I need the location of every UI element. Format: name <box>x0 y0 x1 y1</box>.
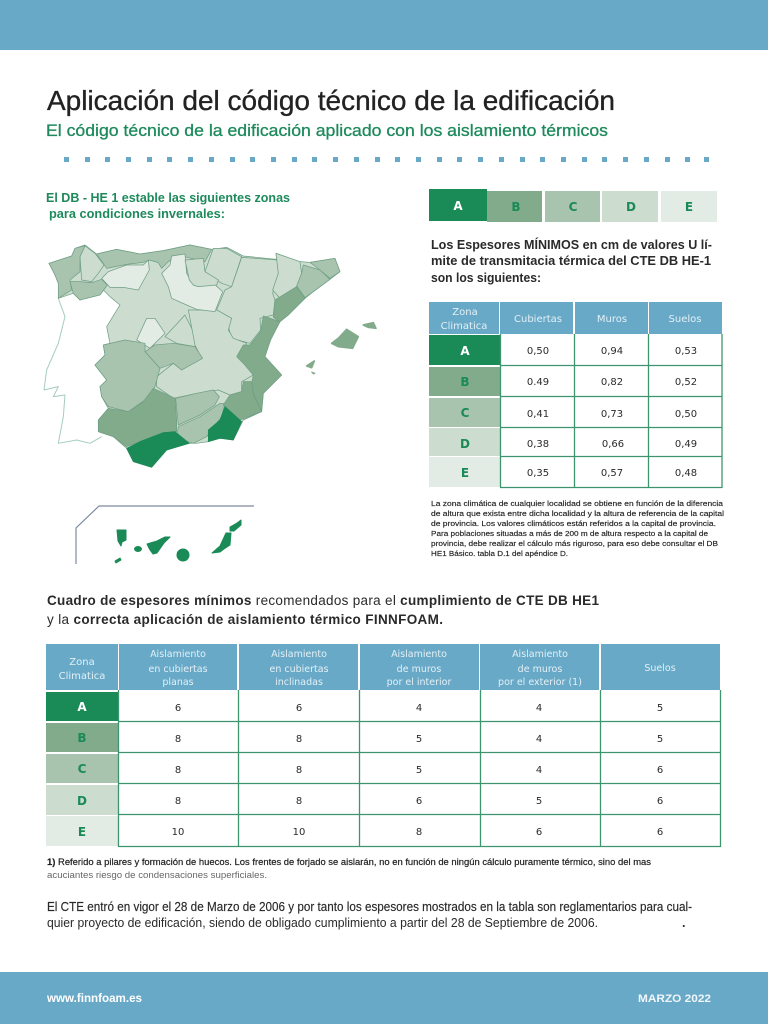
table values: 0,41 <box>527 409 549 420</box>
map intro text: para condiciones invernales: <box>49 207 225 221</box>
dotted divider <box>64 157 709 162</box>
table header: Cubiertas <box>514 314 562 325</box>
zone legend: B <box>511 200 521 214</box>
minimum thickness intro text: Los Espesores MÍNIMOS en cm de valores U lí- <box>431 237 712 252</box>
zone cells <box>46 692 118 846</box>
table footnote: acuciantes riesgo de condensaciones superficiales. <box>47 870 267 880</box>
closing paragraph: . <box>682 916 685 930</box>
zone cells: E <box>78 825 86 839</box>
table values: 5 <box>416 734 422 745</box>
zone cells: D <box>77 794 87 808</box>
climate zone note: La zona climática de cualquier localidad se obtiene en función de la diferencia <box>431 499 724 508</box>
zone cells: A <box>77 700 87 714</box>
map of Spain climate zones <box>44 245 376 467</box>
website: www.finnfoam.es <box>46 993 142 1005</box>
table header: por el interior <box>387 677 451 688</box>
zone legend: C <box>569 200 578 214</box>
climate zone note: provincia, debe realizar el cálculo más riguroso, para eso debe consultar el DB <box>431 539 718 548</box>
closing paragraph <box>47 900 692 930</box>
table header: en cubiertas <box>148 664 208 675</box>
Portugal outline <box>44 298 102 443</box>
table values: 10 <box>172 827 184 838</box>
climate zone note: de provincia. Los valores climáticos están referidos a la capital de provincia. <box>431 519 716 528</box>
table header: Aislamiento <box>391 649 447 660</box>
table values: 0,35 <box>527 468 549 479</box>
table header: en cubiertas <box>269 664 329 675</box>
table values: 6 <box>657 765 663 776</box>
table values: 5 <box>536 796 542 807</box>
table: U-value limits <box>429 302 722 488</box>
table values: 4 <box>536 765 542 776</box>
table values: 6 <box>175 703 181 714</box>
zone legend: E <box>685 200 693 214</box>
table values: 6 <box>657 827 663 838</box>
table values: 4 <box>536 703 542 714</box>
table header: Suelos <box>644 663 676 674</box>
climate zone note: HE1 Básico. tabla D.1 del apéndice D. <box>431 549 568 558</box>
table values: 0,66 <box>602 439 624 450</box>
zone legend <box>429 189 717 222</box>
table values: 0,52 <box>675 377 697 388</box>
table header: Climatica <box>59 671 105 682</box>
table values: 6 <box>296 703 302 714</box>
table values: 6 <box>536 827 542 838</box>
land base <box>49 245 340 467</box>
minimum thickness intro text: son los siguientes: <box>431 271 541 285</box>
minimum thickness intro text <box>431 237 712 285</box>
table values: 8 <box>175 734 181 745</box>
zone cells: D <box>460 437 470 451</box>
table values: 6 <box>657 796 663 807</box>
zone legend: D <box>626 200 636 214</box>
table values: 5 <box>657 703 663 714</box>
zone cells: C <box>78 762 87 776</box>
zone legend: A <box>453 199 463 213</box>
table values: 8 <box>296 796 302 807</box>
table values: 8 <box>416 827 422 838</box>
climate zone note: de altura que exista entre dicha localidad y la altura de referencia de la capital <box>431 509 724 518</box>
table footnote: 1) Referido a pilares y formación de huecos. Los frentes de forjado se aislarán, no en función de ningún cálculo puramente térmico, sino del mas <box>47 857 652 867</box>
section heading: y la correcta aplicación de aislamiento térmico FINNFOAM. <box>47 612 443 627</box>
table header: Aislamiento <box>150 649 206 660</box>
closing paragraph: quier proyecto de edificación, siendo de obligado cumplimiento a partir del 28 de Septiembre de 2006. <box>47 916 598 930</box>
table values: 0,94 <box>601 346 623 357</box>
table values: 5 <box>657 734 663 745</box>
table header: Zona <box>69 657 95 668</box>
table header <box>429 302 722 334</box>
zone cells: B <box>77 731 87 745</box>
zone cells: C <box>461 406 470 420</box>
table header: de muros <box>397 664 441 675</box>
table header: por el exterior (1) <box>498 677 582 688</box>
table values: 0,53 <box>675 346 697 357</box>
Balearic islands <box>332 329 358 348</box>
table header <box>46 644 720 690</box>
subtitle: El código técnico de la edificación aplicado con los aislamiento térmicos <box>46 121 608 140</box>
table header: Climatica <box>441 321 487 332</box>
top banner <box>0 0 768 50</box>
title: Aplicación del código técnico de la edificación <box>47 85 615 116</box>
table values: 4 <box>416 703 422 714</box>
table header: de muros <box>518 664 562 675</box>
table values: 0,38 <box>527 439 549 450</box>
minimum thickness intro text: mite de transmitacia térmica del CTE DB HE-1 <box>431 254 711 268</box>
table values: 0,57 <box>601 468 623 479</box>
table values: 8 <box>296 734 302 745</box>
table values: 8 <box>296 765 302 776</box>
map intro text: El DB - HE 1 estable las siguientes zonas <box>46 191 290 205</box>
table values: 8 <box>175 796 181 807</box>
table values: 0,73 <box>601 409 623 420</box>
table values: 6 <box>416 796 422 807</box>
table values <box>527 346 697 479</box>
table values: 10 <box>293 827 305 838</box>
table header: Aislamiento <box>271 649 327 660</box>
table values: 0,49 <box>675 439 697 450</box>
table values: 8 <box>175 765 181 776</box>
section heading <box>47 593 599 627</box>
table header: inclinadas <box>275 677 323 688</box>
table header: Aislamiento <box>512 649 568 660</box>
zone cells <box>429 335 500 487</box>
climate zone note <box>431 499 724 558</box>
climate zone note: Para poblaciones situadas a más de 200 m de altura respecto a la capital de <box>431 529 708 538</box>
table footnote <box>47 857 652 880</box>
zone cells: B <box>460 375 470 389</box>
table header: Zona <box>452 307 478 318</box>
section heading: Cuadro de espesores mínimos recomendados para el cumplimiento de CTE DB HE1 <box>47 593 599 608</box>
table values: 0,50 <box>675 409 697 420</box>
footer band: MARZO 2022 <box>638 993 711 1005</box>
zone cells: E <box>461 466 469 480</box>
footer band <box>0 972 768 1024</box>
map intro text <box>46 191 290 221</box>
Canary Islands inset <box>76 506 254 564</box>
table values: 0,48 <box>675 468 697 479</box>
table values: 4 <box>536 734 542 745</box>
table: recommended thickness <box>46 644 721 847</box>
closing paragraph: El CTE entró en vigor el 28 de Marzo de 2006 y por tanto los espesores mostrados en la tabla son reglamentarios para cual- <box>47 900 692 914</box>
table header: Muros <box>597 314 627 325</box>
zone cells: A <box>460 344 470 358</box>
table values <box>172 703 663 838</box>
table values: 5 <box>416 765 422 776</box>
table values: 0.49 <box>527 377 549 388</box>
table values: 0,50 <box>527 346 549 357</box>
table header: planas <box>162 677 194 688</box>
table values: 0,82 <box>601 377 623 388</box>
table header: Suelos <box>669 314 701 325</box>
